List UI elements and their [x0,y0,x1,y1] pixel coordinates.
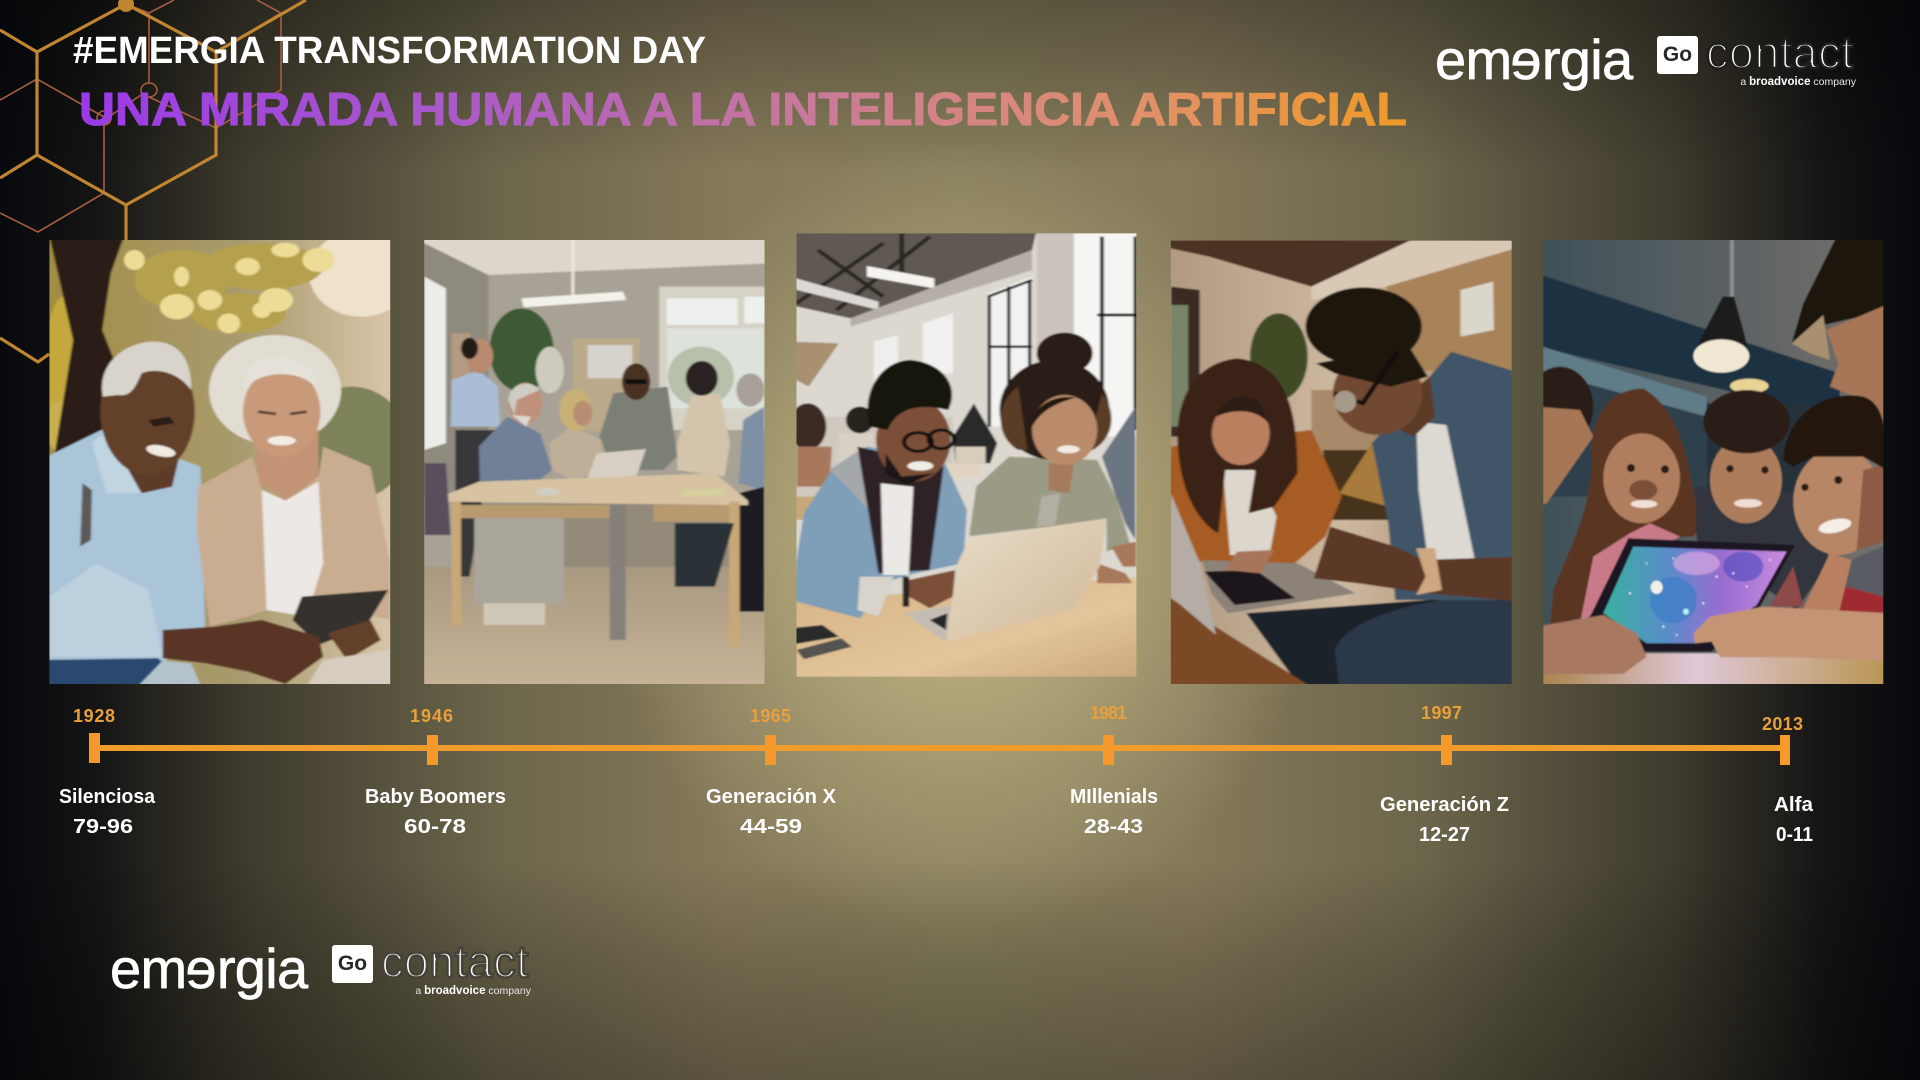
man [1372,352,1521,600]
photo strip [49,233,1884,684]
logo: broadvoice tagline: a broadvoice company [415,985,531,997]
standing woman [454,429,496,578]
photo: children around glowing tablet [1527,233,1890,690]
logo: emergia: em [110,937,186,1000]
photo: elderly couple with tablet [49,240,390,684]
timeline marker 1965: 44-59 [740,816,802,838]
right boy [1846,546,1884,597]
timeline marker 1997: 12-27 [1419,824,1470,846]
photo: millennials with laptop in loft [789,230,1144,683]
seated man [479,417,552,483]
timeline marker 1997: Generación Z [1380,794,1509,816]
gradient main heading: UNA MIRADA HUMANA A LA INTELIGENCIA ARTIFICIAL [79,83,1407,135]
logo: Go box [1657,36,1698,74]
photo: Gen Z pair at laptop in cafe [1162,237,1521,690]
tablet and hands [293,590,388,645]
timeline marker 1946: Baby Boomers [365,786,506,808]
logo: emergia [110,937,308,1000]
timeline marker 1965: Generación X [706,786,837,808]
dark woman right [677,393,730,477]
man arm and watch [1314,527,1521,602]
timeline marker 1981: MIllenials [1070,786,1158,808]
man [40,430,205,663]
timeline marker 1965 [706,706,837,838]
table [790,577,1144,683]
timeline marker 1981: 1981 [1090,703,1127,723]
woman [1167,430,1342,565]
timeline marker 2013 [1762,714,1814,846]
timeline marker 2013: Alfa [1774,794,1814,816]
laptop [587,448,647,478]
timeline marker 1981: 28-43 [1084,816,1143,838]
timeline marker 1928: Silenciosa [59,786,156,808]
top right boy [1792,237,1890,343]
jeans and table [1246,598,1443,684]
logo: emergia: em [1435,28,1511,91]
left girl [1543,366,1594,427]
hands [1537,615,1647,674]
logo: emergia: rgia [217,937,307,1000]
timeline axis line [95,745,1785,751]
event hashtag heading: #EMERGIA TRANSFORMATION DAY [73,30,706,72]
timeline marker 1981 [1070,703,1158,838]
right man [739,407,765,490]
logos top right [1435,27,1856,91]
logo: broadvoice tagline: a broadvoice company [1740,76,1856,88]
laptop [904,605,953,642]
title block [73,30,1407,135]
logo: contact: contact [381,936,529,987]
woman [209,335,341,445]
woman [969,457,1130,552]
tablet [1590,538,1795,652]
logo: Go box: Go [1663,43,1692,66]
floor [418,567,772,690]
timeline marker 1997: 1997 [1421,703,1462,723]
photo: older colleagues around office table [418,233,773,690]
logo: emergia: e [186,937,217,1000]
logo: contact: contact [1706,27,1854,78]
logo: emergia [1435,28,1634,91]
center girl [1550,388,1702,627]
timeline marker 1928: 1928 [73,706,115,726]
timeline marker 1928: 79-96 [73,816,133,838]
logo: emergia: rgia [1542,28,1632,91]
timeline marker 1946 [365,706,506,838]
timeline marker 1928 [59,706,156,838]
table [1543,652,1884,684]
timeline marker 2013: 2013 [1762,714,1803,734]
right side person [1102,407,1135,540]
timeline marker 2013: 0-11 [1776,824,1813,846]
table [441,473,748,505]
timeline marker 1946: 1946 [410,706,453,726]
timeline marker 1997 [1380,703,1509,846]
timeline marker 1965: 1965 [750,706,791,726]
laptop [1171,493,1216,635]
logos bottom left [110,936,531,1000]
timeline marker 1946: 60-78 [404,816,466,838]
logo: Go box: Go [338,952,367,975]
center boy [1695,487,1828,610]
logo: Go box [332,945,373,983]
standing man [599,387,677,470]
seated woman [550,427,604,480]
logo: emergia: e [1511,28,1542,91]
man [790,447,967,618]
phones [790,625,839,645]
